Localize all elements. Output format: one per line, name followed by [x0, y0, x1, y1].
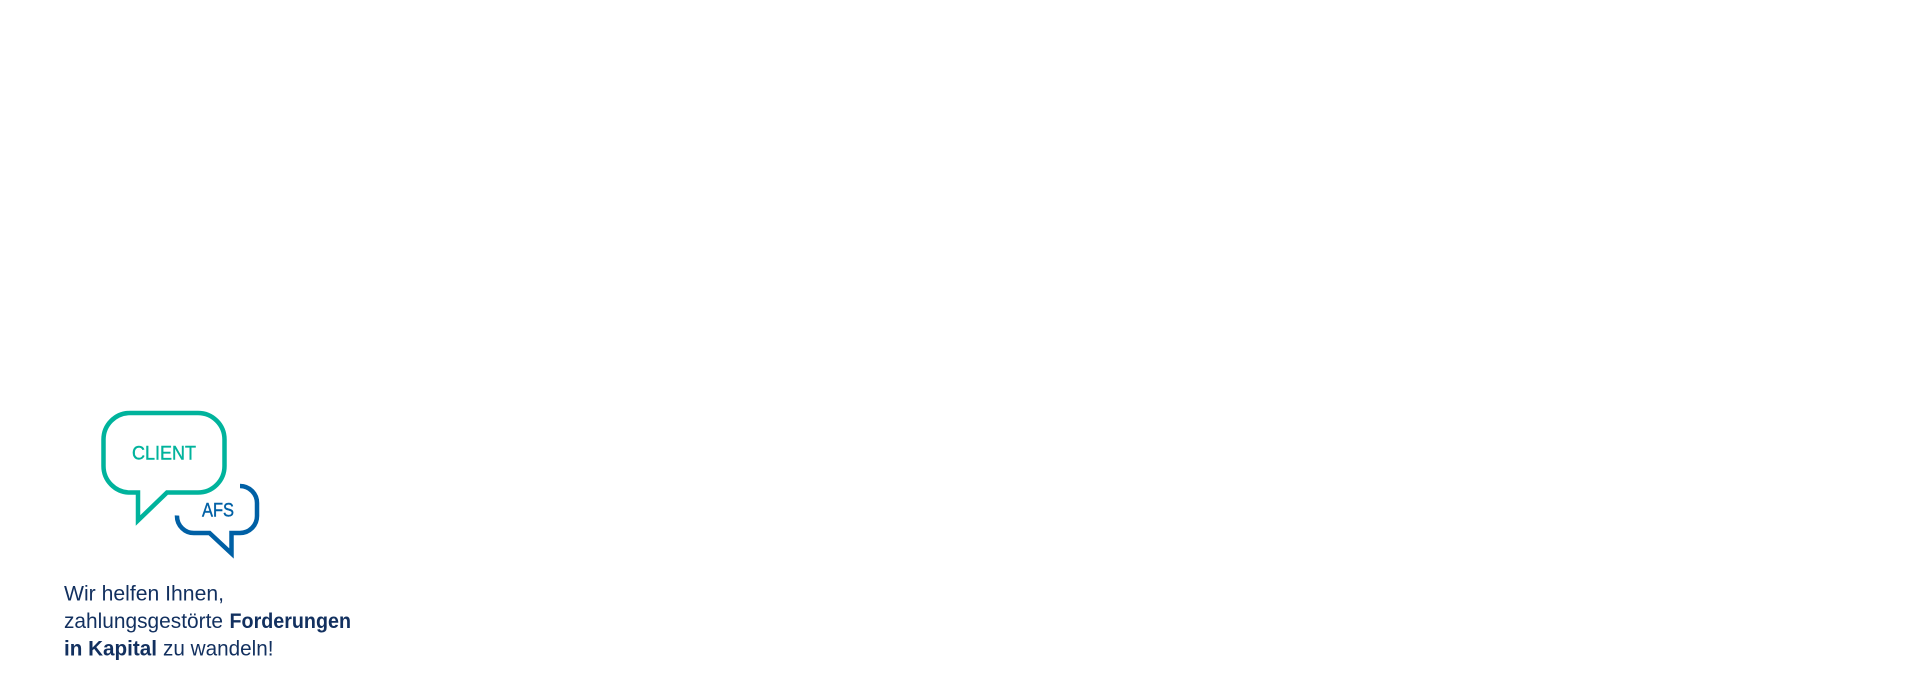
tagline text: in Kapital [64, 638, 157, 660]
icon: AFS speech bubble [177, 486, 257, 554]
tagline text: Forderungen [230, 610, 351, 633]
tagline text: Wir helfen Ihnen, [64, 582, 224, 606]
tagline text: zu wandeln! [163, 638, 274, 660]
tagline text [64, 582, 351, 660]
tagline text: zahlungsgestörte [64, 610, 223, 633]
icon: speech bubbles [104, 413, 257, 554]
icon: client speech bubble [104, 413, 224, 520]
AFS label: AFS [202, 500, 234, 522]
client label: CLIENT [132, 442, 196, 464]
